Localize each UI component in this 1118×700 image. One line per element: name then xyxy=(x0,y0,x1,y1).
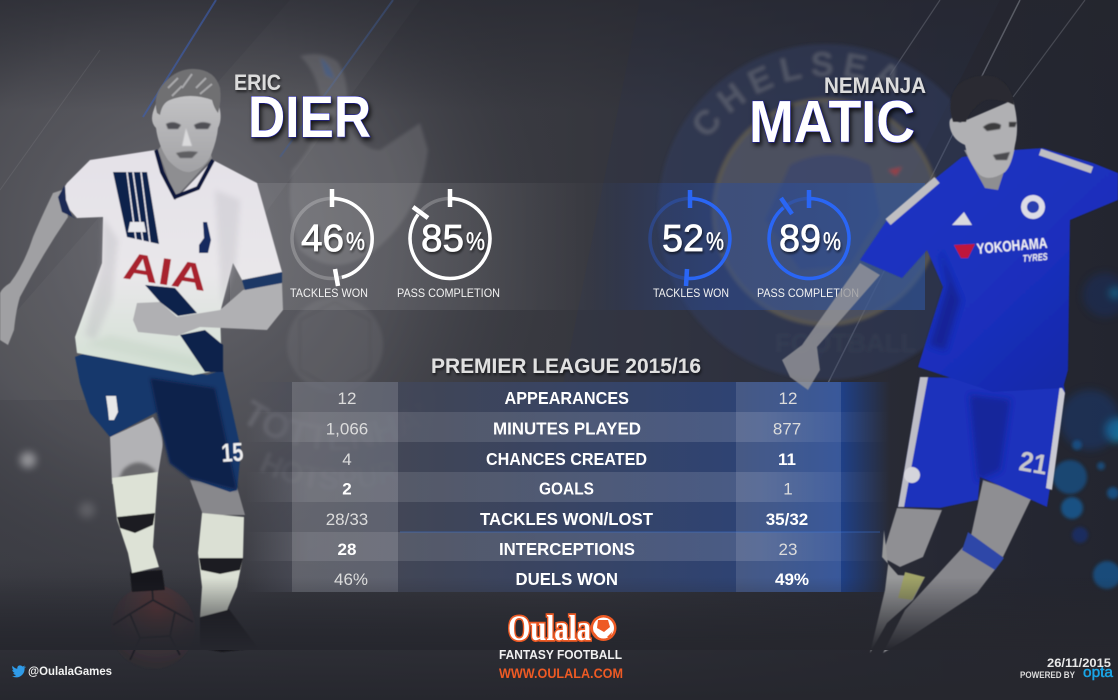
logo: Oulala: Oulala xyxy=(508,608,591,648)
Matic stat values: 877 xyxy=(773,420,801,438)
shorts xyxy=(898,377,1065,508)
ring: Dier tackles won xyxy=(290,189,372,300)
ring: Matic pass completion: 89 xyxy=(779,218,821,260)
shorts xyxy=(75,350,241,492)
Matic stat values: 1 xyxy=(783,480,793,498)
ring: Matic pass completion: PASS COMPLETION xyxy=(757,286,859,300)
stat labels: GOALS xyxy=(539,478,594,498)
name: Eric Dier xyxy=(234,70,371,150)
ring: Dier tackles won: % xyxy=(346,228,365,256)
date: 26/11/2015 xyxy=(1047,656,1111,670)
name: Eric Dier: DIER xyxy=(248,85,371,150)
player: Eric Dier xyxy=(0,69,283,669)
sponsor: AIA xyxy=(121,245,210,300)
logo caption: FANTASY FOOTBALL xyxy=(499,647,622,662)
website: WWW.OULALA.COM xyxy=(499,666,623,681)
ring: Dier pass completion xyxy=(397,189,500,300)
boots xyxy=(130,570,258,652)
Dier stat values xyxy=(326,389,368,589)
watermark: Chelsea crest: FOOTBALL xyxy=(775,328,917,358)
Dier stat values: 2 xyxy=(342,480,352,498)
hair xyxy=(950,76,1014,122)
powered by: POWERED BY xyxy=(1020,670,1076,681)
ring: Matic tackles won xyxy=(650,190,730,300)
name: Nemanja Matic: MATIC xyxy=(749,89,915,155)
logo: Opta: opta xyxy=(1083,664,1114,681)
football xyxy=(111,585,195,669)
Dier stat values: 4 xyxy=(342,450,352,469)
shirt badge xyxy=(199,222,211,253)
shorts badge xyxy=(904,467,920,483)
watermark: Tottenham crest: TOTTENHAM xyxy=(248,400,286,438)
watermark: Chelsea crest xyxy=(658,44,967,380)
foot fade xyxy=(0,578,1118,650)
watermark: Chelsea crest: CHELSEA xyxy=(693,50,896,136)
shirt xyxy=(58,150,282,375)
left arm xyxy=(782,263,880,390)
shirt stripes xyxy=(113,172,159,244)
left arm xyxy=(0,190,68,345)
watermark: Tottenham crest xyxy=(248,54,428,475)
Matic stat values: 23 xyxy=(779,540,797,559)
shorts badge xyxy=(106,396,118,420)
socks xyxy=(112,472,159,573)
Matic stat values: 49% xyxy=(775,570,809,589)
ring: Matic tackles won: 52 xyxy=(662,218,704,260)
stat labels: APPEARANCES xyxy=(504,388,629,408)
Matic stat values: 35/32 xyxy=(766,510,808,529)
head xyxy=(949,100,1017,178)
stat labels: DUELS WON xyxy=(516,569,618,589)
shirt shading xyxy=(930,250,960,350)
sponsor sub: TYRES xyxy=(1022,252,1048,265)
sponsor mark xyxy=(954,244,975,258)
stat labels: CHANCES CREATED xyxy=(486,449,647,469)
Matic stat values xyxy=(766,389,809,589)
name: Nemanja Matic: NEMANJA xyxy=(824,73,926,98)
Dier stat values: 28 xyxy=(338,540,356,559)
panel: Matic ring band xyxy=(590,183,925,310)
right forearm xyxy=(133,283,283,336)
shirt xyxy=(860,148,1118,392)
right leg xyxy=(970,480,1032,557)
ring: Matic tackles won: % xyxy=(706,228,724,256)
watermark: Tottenham crest: HOTSPUR xyxy=(261,454,279,475)
stat labels: MINUTES PLAYED xyxy=(493,418,641,438)
left leg xyxy=(882,508,942,567)
neck xyxy=(964,150,1011,190)
badge xyxy=(1021,195,1045,219)
face xyxy=(166,122,211,158)
stat labels xyxy=(480,388,653,589)
name: Eric Dier: ERIC xyxy=(234,70,281,95)
ring: Matic pass completion xyxy=(757,190,859,300)
sponsor: YOKOHAMA xyxy=(976,235,1048,258)
ring: Dier tackles won: TACKLES WON xyxy=(290,286,368,300)
bokeh lights xyxy=(20,273,1118,589)
ring: Dier tackles won: 46 xyxy=(301,218,344,260)
twitter handle: @OulalaGames xyxy=(28,664,112,678)
stat labels: TACKLES WON/LOST xyxy=(480,509,653,529)
legs xyxy=(110,417,163,484)
collar and neck xyxy=(158,135,212,198)
shoulder stripes xyxy=(888,180,937,222)
shorts number: 15 xyxy=(220,437,244,468)
ring: Dier pass completion: PASS COMPLETION xyxy=(397,286,500,300)
head xyxy=(152,92,221,172)
hair xyxy=(156,69,221,115)
ring: Dier pass completion: % xyxy=(466,228,485,256)
adidas mark xyxy=(952,212,972,225)
Dier stat values: 1,066 xyxy=(326,420,368,438)
shorts number: 21 xyxy=(1017,445,1050,481)
ring: Matic tackles won: TACKLES WON xyxy=(653,286,729,300)
panel: Dier ring band xyxy=(230,183,620,310)
heading: Premier League: PREMIER LEAGUE 2015/16 xyxy=(431,355,701,378)
Dier stat values: 46% xyxy=(334,570,368,589)
Dier stat values: 12 xyxy=(338,389,356,408)
shirt shading xyxy=(85,190,240,370)
hair highlights xyxy=(168,74,212,96)
stats table background xyxy=(245,382,890,592)
player: Nemanja Matic xyxy=(782,76,1118,653)
face xyxy=(983,122,1017,160)
stat labels: INTERCEPTIONS xyxy=(499,539,635,559)
Matic stat values: 11 xyxy=(778,450,796,469)
under armour mark xyxy=(128,222,146,232)
ring: Matic pass completion: % xyxy=(823,228,841,256)
icon: twitter bird xyxy=(12,665,26,677)
Matic stat values: 12 xyxy=(779,389,797,408)
sleeve cuffs xyxy=(242,272,282,290)
Dier stat values: 28/33 xyxy=(326,510,368,529)
ring: Dier pass completion: 85 xyxy=(421,218,464,260)
